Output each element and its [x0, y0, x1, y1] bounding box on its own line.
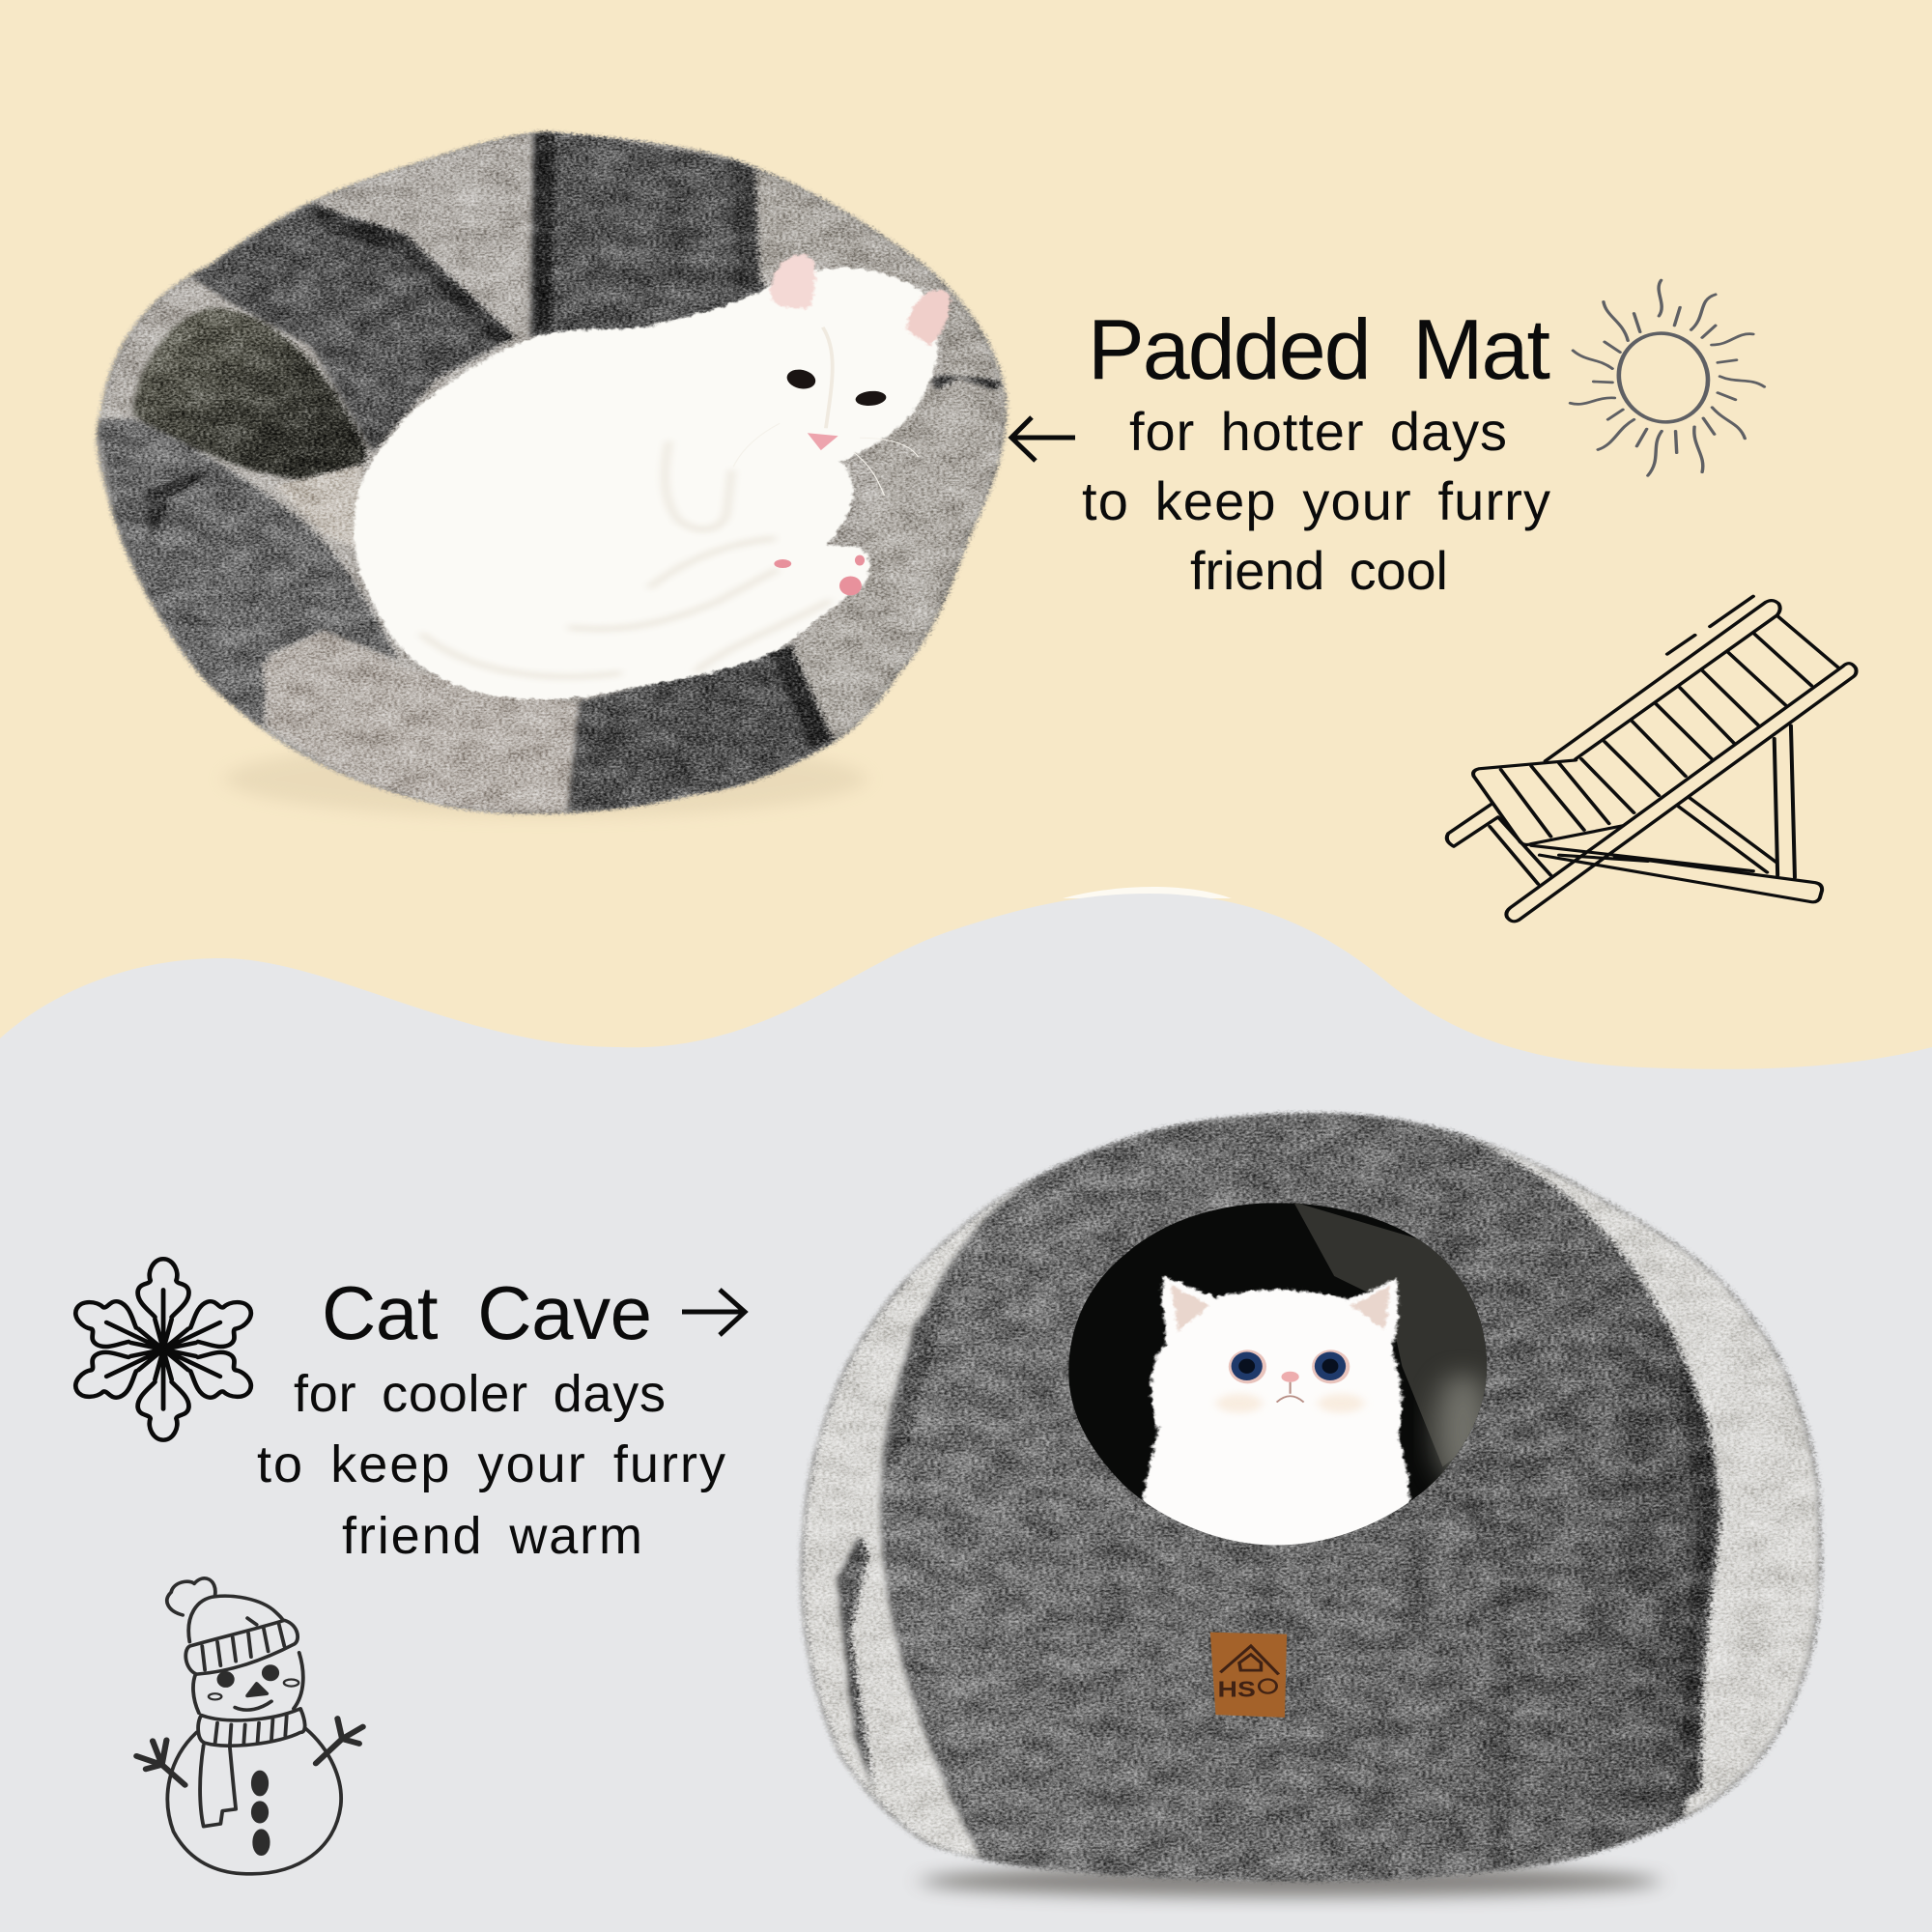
kitten ears [1170, 1284, 1390, 1332]
text: cat cave description [257, 1365, 725, 1565]
icon: deck chair [1447, 596, 1857, 922]
snowflake arm 1 [138, 1259, 188, 1350]
stick arms [136, 1719, 363, 1785]
cave shadow [921, 1865, 1660, 1897]
text: cat cave description: for cooler days [294, 1365, 666, 1423]
white cat [354, 254, 951, 699]
main beam [1506, 664, 1857, 922]
snowflake arm 4 [138, 1350, 188, 1440]
white kitten [1143, 1276, 1409, 1551]
heading: Cat Cave: Cat Cave [322, 1270, 652, 1355]
face [209, 1666, 298, 1710]
heading: Padded Mat: Padded Mat [1088, 301, 1550, 397]
cross brace [1678, 798, 1776, 872]
snowman body [167, 1728, 341, 1874]
text: padded mat description [1082, 401, 1550, 601]
mat shadow [225, 741, 866, 817]
product photo: padded mat with white cat [91, 128, 1012, 818]
hat pom-pom [167, 1578, 215, 1615]
buttons [253, 1772, 269, 1854]
felt cave [792, 1101, 1855, 1932]
snowflake arm 3 [152, 1328, 262, 1411]
snowflake arm 5 [66, 1328, 175, 1411]
snowflake arm 2 [152, 1287, 262, 1371]
foot rail and legs [1447, 804, 1550, 884]
hat [185, 1620, 298, 1674]
text: padded mat description: friend cool [1190, 540, 1448, 601]
felt mat [91, 128, 1012, 817]
icon: sun [1570, 280, 1764, 475]
bottom beam [1531, 845, 1822, 902]
snowman head [193, 1653, 303, 1713]
product photo: cat cave with kitten [792, 1101, 1855, 1932]
text: padded mat description: for hotter days [1129, 401, 1507, 462]
rear strut [1775, 725, 1795, 877]
text: padded mat description: to keep your furry [1082, 470, 1550, 531]
kitten nose and mouth [1216, 1372, 1364, 1413]
curled ear right [906, 290, 951, 347]
leather badge [1210, 1633, 1287, 1718]
cave opening [1057, 1197, 1497, 1551]
snowflake arm 6 [66, 1287, 175, 1371]
white crescent above wave [1063, 887, 1232, 898]
leather badge: HS [1218, 1677, 1256, 1702]
arrow pointing to mat [1011, 417, 1075, 461]
kitten eyes [1229, 1350, 1350, 1383]
arrow pointing to cave [682, 1290, 746, 1335]
seat and slats [1473, 760, 1623, 845]
curled ear left [771, 254, 815, 308]
cat toe pads [774, 555, 865, 595]
back rest rail and slats [1546, 601, 1780, 761]
text: cat cave description: to keep your furry [257, 1435, 725, 1493]
icon: snowflake [66, 1259, 262, 1440]
text: cat cave description: friend warm [342, 1507, 642, 1565]
scarf [198, 1709, 305, 1746]
cat face [733, 327, 919, 496]
background: grey wave lower section [0, 894, 1932, 1932]
icon: snowman [136, 1578, 363, 1874]
cat fur shading [422, 442, 829, 677]
chair motion lines [1667, 596, 1753, 654]
